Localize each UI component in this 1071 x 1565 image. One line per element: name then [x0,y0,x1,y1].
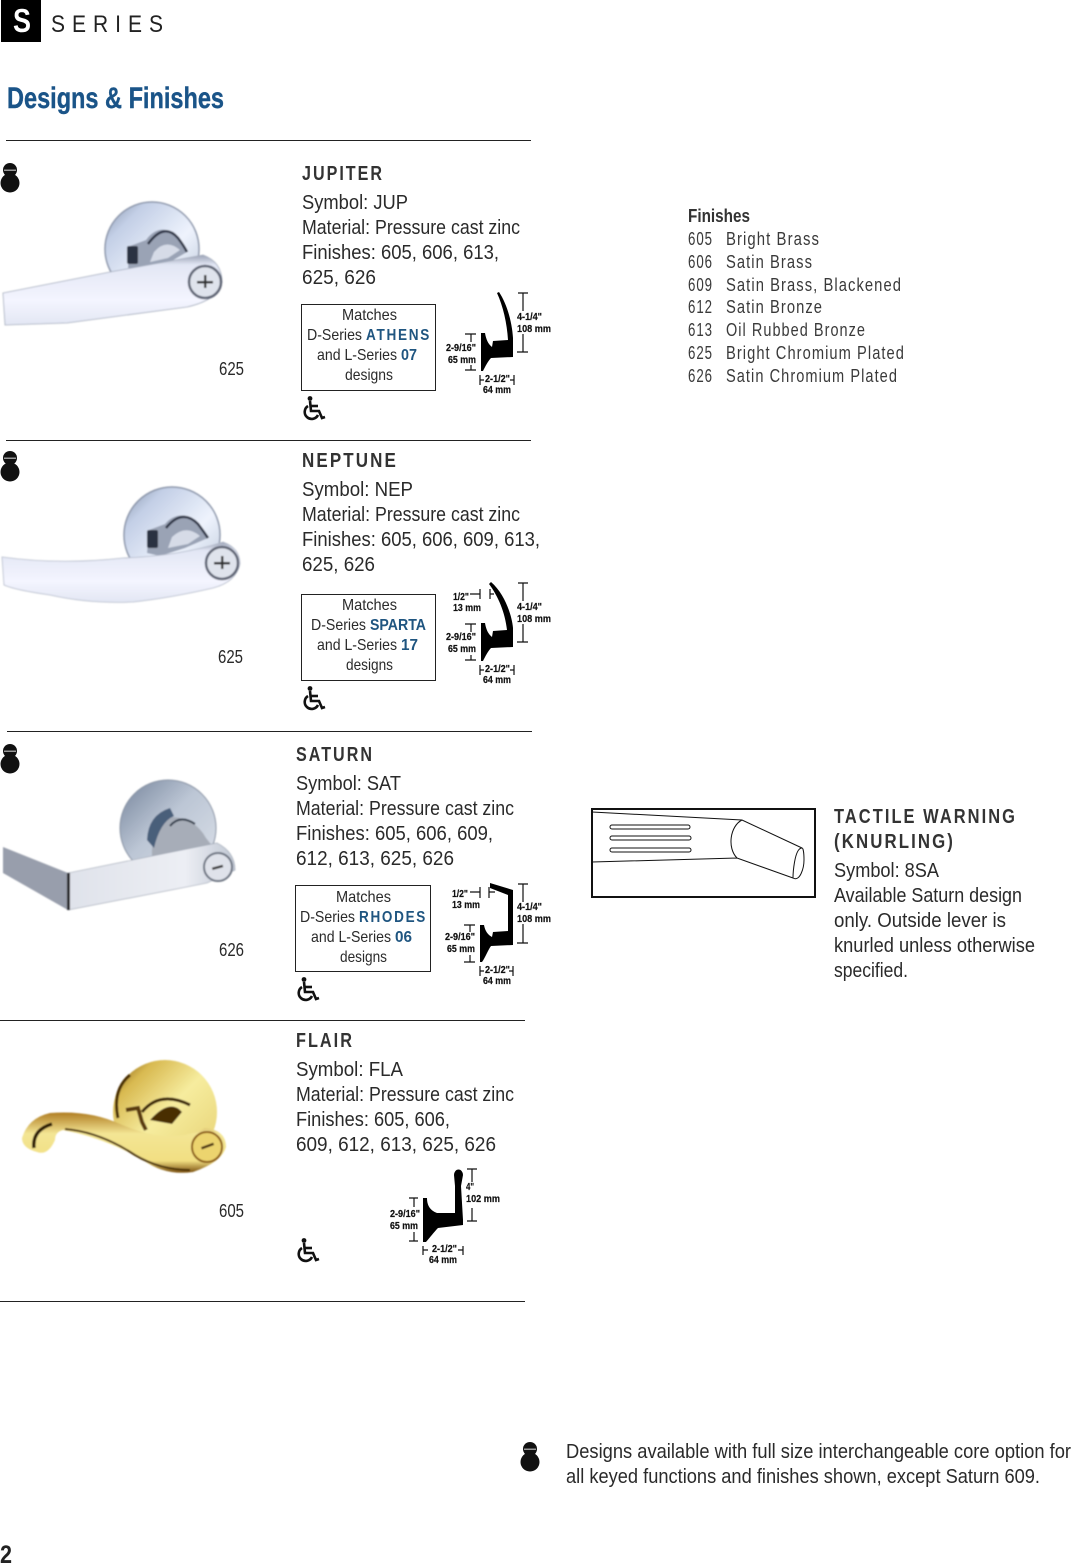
specs text: Symbol: JUP [302,191,408,214]
diagram: Flair dimensions: 2-9/16" [390,1208,420,1220]
icon: interchangeable core badge [520,1442,540,1472]
panel: finishes list: 625 [688,343,713,363]
diagram: Neptune dimensions: 4-1/4" [517,601,542,613]
diagram: Jupiter dimensions: 65 mm [448,354,476,366]
panel: Jupiter [0,163,551,419]
finish label: 605 [219,1201,244,1221]
diagram: Saturn dimensions: 13 mm [452,899,480,911]
diagram: Neptune dimensions: 65 mm [448,643,476,655]
panel: finishes list: Satin Brass, Blackened [726,275,902,295]
specs text: Finishes: 605, 606, 609, [296,822,493,845]
series header badge [1,0,170,42]
callout: matching designs: 17 [401,637,418,654]
diagram: Neptune dimensions [446,582,551,686]
callout: matching designs: D-Series [311,617,366,634]
specs text: Symbol: NEP [302,478,413,501]
panel: tactile warning text: only. Outside lever is [834,909,1006,932]
icon: accessible wheelchair [299,1238,319,1261]
callout: matching designs: Matches [336,889,391,906]
callout: matching designs [296,886,430,972]
callout: matching designs: RHODES [359,909,427,926]
diagram: Saturn dimensions: 1/2" [452,888,468,900]
specs text: Material: Pressure cast zinc [296,1083,514,1106]
callout: matching designs [302,304,436,390]
diagram: Flair dimensions: 2-1/2" [432,1243,457,1255]
diagram: Jupiter dimensions: 2-9/16" [446,342,476,354]
specs text: Symbol: FLA [296,1058,403,1081]
icon: accessible wheelchair [305,686,325,709]
photo: Jupiter lever [3,202,222,325]
icon: interchangeable core badge [0,163,20,192]
callout: matching designs: 07 [401,347,417,364]
specs text: Symbol: SAT [296,772,401,795]
callout: matching designs: designs [345,367,393,384]
diagram: Saturn dimensions: 2-1/2" [485,964,510,976]
finish label: 625 [218,647,243,667]
specs text: 612, 613, 625, 626 [296,847,454,870]
callout: matching designs: ATHENS [366,327,431,344]
panel: finishes list: Satin Brass [726,252,813,272]
callout: matching designs [302,594,436,680]
callout: matching designs: D-Series [300,909,355,926]
specs text [302,191,520,289]
panel: tactile warning text: (KNURLING) [834,831,955,853]
specs text [296,772,514,870]
panel: Saturn [0,744,551,1000]
footnote [520,1440,1071,1488]
specs text: Finishes: 605, 606, 609, 613, [302,528,540,551]
callout: matching designs: and L-Series [311,929,391,946]
heading: FLAIR: FLAIR [296,1030,354,1052]
icon: accessible wheelchair [299,977,319,1000]
panel: Flair [22,1030,514,1266]
panel: Neptune [0,450,551,709]
callout: matching designs: 06 [395,929,412,946]
specs text [302,478,540,576]
callout: matching designs: Matches [342,307,397,324]
specs text: 625, 626 [302,266,376,289]
diagram: Flair dimensions: 64 mm [429,1254,457,1266]
diagram: Neptune dimensions: 1/2" [453,591,469,603]
specs text: Material: Pressure cast zinc [296,797,514,820]
finish label: 626 [219,940,244,960]
heading: JUPITER: JUPITER [302,163,384,185]
panel: tactile warning text: specified. [834,959,908,982]
panel: tactile warning text: knurled unless otherwise [834,934,1035,957]
diagram: Neptune dimensions: 64 mm [483,674,511,686]
heading: NEPTUNE: NEPTUNE [302,450,398,472]
callout: matching designs: and L-Series [317,637,397,654]
diagram: Saturn dimensions: 108 mm [517,913,551,925]
photo: Saturn lever [3,780,235,910]
specs text [296,1058,514,1156]
diagram: Neptune dimensions: 2-9/16" [446,631,476,643]
callout: matching designs: designs [340,949,387,966]
specs text: Finishes: 605, 606, 613, [302,241,499,264]
panel: finishes list: Finishes [688,206,750,226]
diagram: Flair dimensions: 4" [466,1181,474,1193]
finish label: 625 [219,359,244,379]
diagram: Saturn dimensions: 2-9/16" [445,931,475,943]
photo: Flair lever [22,1060,226,1173]
panel: finishes list: 626 [688,366,713,386]
diagram: Saturn dimensions [445,883,551,987]
panel: tactile warning text: Symbol: 8SA [834,859,939,882]
diagram: Saturn dimensions: 65 mm [447,943,475,955]
diagram: Flair dimensions: 65 mm [390,1220,418,1232]
icon: interchangeable core badge [0,451,20,482]
page title: Designs & Finishes [7,82,224,115]
panel: finishes list: Bright Chromium Plated [726,343,905,363]
diagram: Neptune dimensions: 2-1/2" [485,663,510,675]
panel: finishes list: 612 [688,297,713,317]
diagram: Neptune dimensions: 13 mm [453,602,481,614]
photo: Neptune lever [2,487,240,602]
specs text: Finishes: 605, 606, [296,1108,450,1131]
diagram: Jupiter dimensions: 4-1/4" [517,311,542,323]
callout: matching designs: and L-Series [317,347,397,364]
diagram: knurled lever [592,809,815,897]
panel: finishes list [688,206,905,386]
panel: finishes list: Satin Bronze [726,297,823,317]
callout: matching designs: designs [346,657,393,674]
panel: finishes list: Oil Rubbed Bronze [726,320,866,340]
heading: SATURN: SATURN [296,744,374,766]
icon: interchangeable core badge [0,744,20,774]
callout: matching designs: D-Series [307,327,362,344]
diagram: Flair dimensions [390,1169,500,1266]
diagram: Neptune dimensions: 108 mm [517,613,551,625]
specs text: 625, 626 [302,553,375,576]
panel: tactile warning text [834,806,1035,982]
specs text: Material: Pressure cast zinc [302,216,520,239]
diagram: Saturn dimensions: 4-1/4" [517,901,542,913]
series header badge: S [13,2,31,39]
diagram: Saturn dimensions: 64 mm [483,975,511,987]
icon: accessible wheelchair [305,396,325,419]
diagram: Jupiter dimensions: 108 mm [517,323,551,335]
panel: tactile warning text: TACTILE WARNING [834,806,1017,828]
panel: tactile warning text: Available Saturn design [834,884,1022,907]
panel: finishes list: 606 [688,252,713,272]
callout: matching designs: SPARTA [370,617,426,634]
diagram: Jupiter dimensions: 2-1/2" [485,373,510,385]
specs text: 609, 612, 613, 625, 626 [296,1133,496,1156]
panel: finishes list: 609 [688,275,713,295]
callout: matching designs: Matches [342,597,397,614]
panel: finishes list: Bright Brass [726,229,820,249]
panel: finishes list: 605 [688,229,713,249]
diagram: Flair dimensions: 102 mm [466,1193,500,1205]
panel: finishes list: Satin Chromium Plated [726,366,898,386]
series header badge: SERIES [51,11,170,38]
diagram: Jupiter dimensions [446,292,551,396]
panel: finishes list: 613 [688,320,713,340]
specs text: Material: Pressure cast zinc [302,503,520,526]
diagram: Jupiter dimensions: 64 mm [483,384,511,396]
